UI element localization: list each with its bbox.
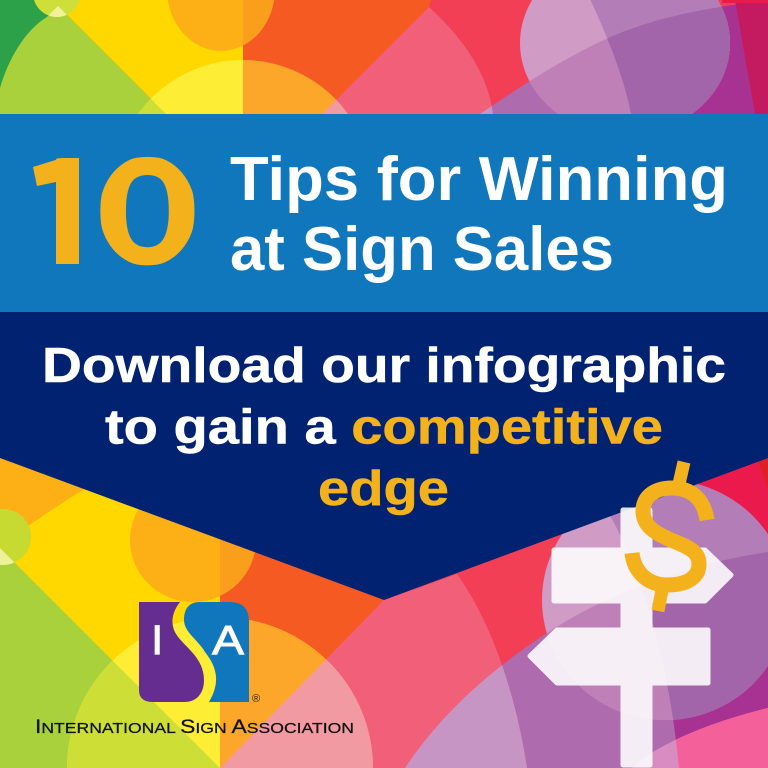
- panel: blue title band: [0, 114, 768, 312]
- title: [230, 145, 728, 284]
- title: Tips for Winning: [230, 145, 728, 214]
- logo wordmark: INTERNATIONAL SIGN ASSOCIATION: [35, 716, 354, 738]
- subheading text: Download our infographic: [42, 339, 726, 393]
- logo: ISA: [139, 602, 260, 705]
- title number: 10: 10: [14, 131, 196, 290]
- title number: 10: [33, 156, 194, 266]
- title: at Sign Sales: [230, 215, 614, 284]
- subheading text: [42, 339, 726, 516]
- icon: dollar sign: [632, 462, 707, 611]
- background: bottom left colour shapes: [0, 450, 400, 768]
- logo: ISA: ®: [252, 693, 260, 705]
- background: top colour band: [0, 0, 768, 114]
- logo: ISA: A: [212, 617, 245, 663]
- background: bottom right colour shapes: [67, 450, 768, 768]
- panel: navy chevron banner: [0, 312, 768, 600]
- subheading text: to gain a competitive: [105, 400, 663, 454]
- icon: signpost: [530, 510, 731, 765]
- logo: ISA: I: [152, 617, 163, 663]
- subheading text: edge: [318, 462, 449, 516]
